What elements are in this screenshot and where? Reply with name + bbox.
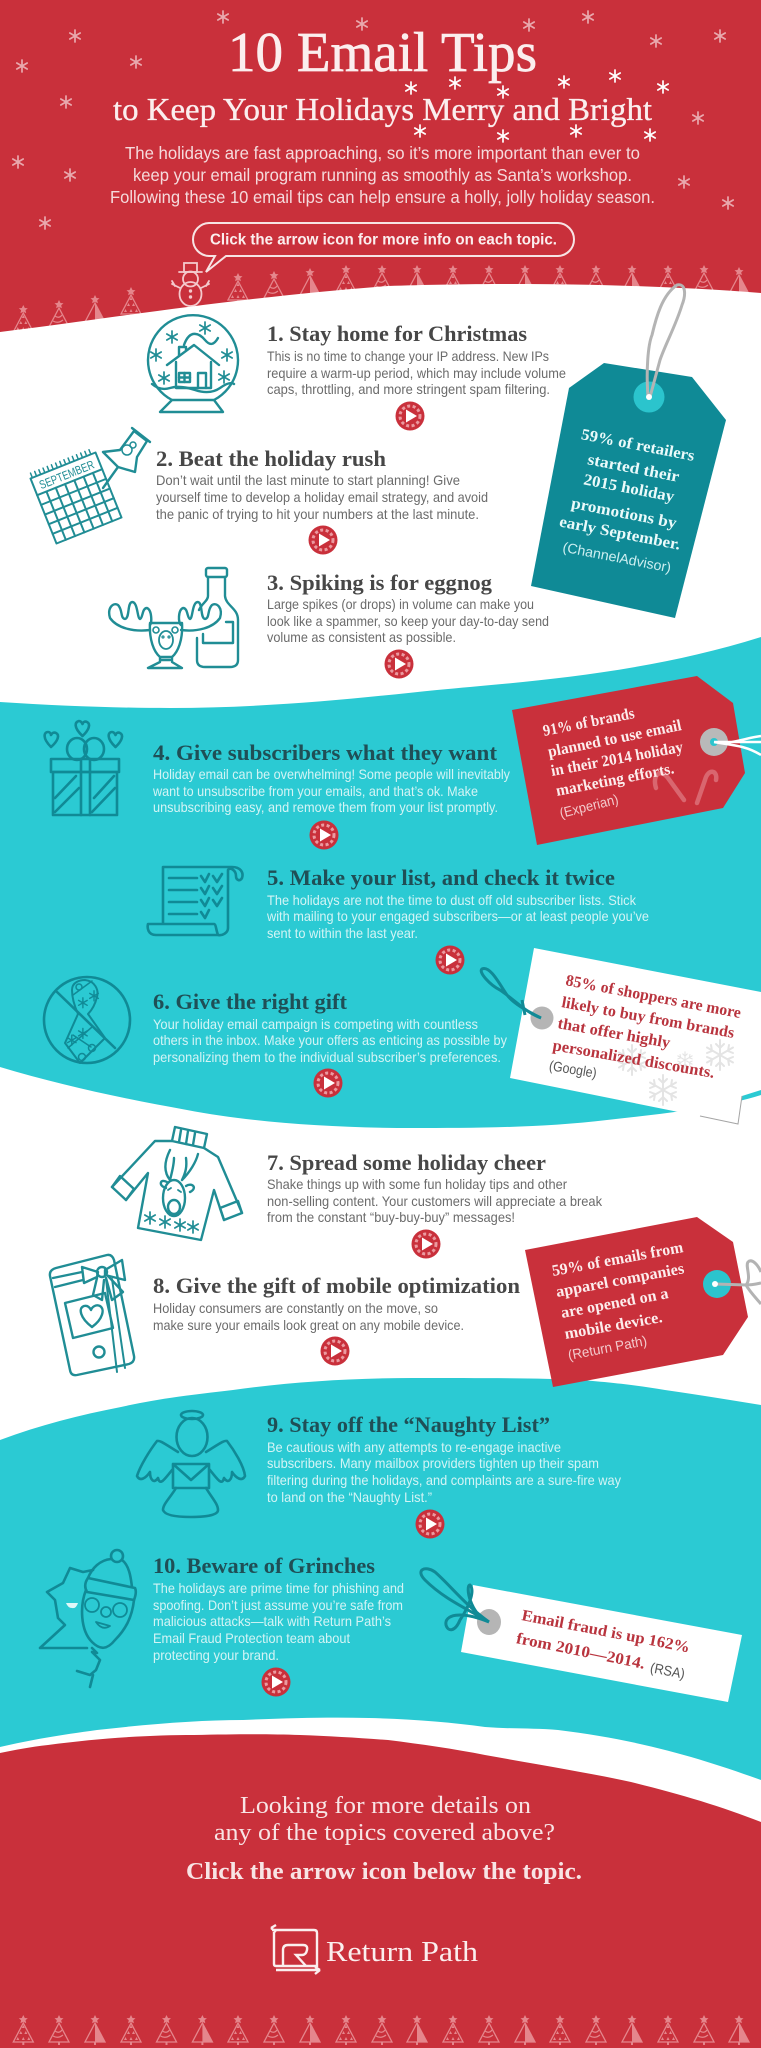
button: tip 1 arrow [396,402,424,430]
button: tip 3 arrow [384,650,414,678]
button: tip 2 arrow [308,526,338,554]
tip 5 text [266,865,649,941]
tip 9 text: to land on the “Naughty List.” [267,1489,432,1505]
tip 7 text: from the constant “buy-buy-buy” messages! [267,1209,515,1225]
tip 4 text: 4. Give subscribers what they want [153,740,498,765]
tip 10 text: 10. Beware of Grinches [153,1553,375,1578]
callout: click the arrow: Click the arrow icon for more info on each topic. [210,232,557,248]
header tree row [13,265,749,335]
tag: white 85% of shoppers: (Google) [548,1057,598,1081]
tip 6 text [153,989,507,1065]
tag: red 59% of emails [525,1217,761,1387]
footer text [186,1793,582,1885]
tip 6 text: 6. Give the right gift [153,989,348,1014]
tip 5 text: with mailing to your engaged subscribers—or at least people you’ve [266,908,649,924]
tip 4 text [152,740,510,815]
icon: calendar and pushpin [29,428,150,543]
icon: snow globe [148,315,238,412]
tag: teal 59% of retailers: 2015 holiday [582,471,676,506]
tag: teal 59% of retailers [531,285,726,618]
tag: teal 59% of retailers: started their [586,451,681,486]
tip 7 text: 7. Spread some holiday cheer [267,1150,546,1175]
white snow band above footer [0,1718,761,2048]
button: tip 9 arrow [416,1510,444,1538]
tip 9 text [267,1412,621,1505]
tip 4 text: Holiday email can be overwhelming! Some people will inevitably [153,766,510,782]
tag: red 59% of emails: apparel companies [555,1260,686,1301]
footer tree row [13,2015,749,2045]
footer text: Looking for more details on [240,1793,531,1819]
tag: white 85% of shoppers: that offer highly [556,1015,672,1052]
tip 8 text: make sure your emails look great on any mobile device. [153,1317,464,1333]
tag: white 85% of shoppers: 85% of shoppers are more [564,972,742,1022]
logo: Return Path [271,1925,479,1974]
tip 7 text [267,1150,603,1225]
tip 10 text: Email Fraud Protection team about [153,1630,350,1646]
tip 8 text [153,1273,520,1333]
tag: red 91% of brands: in their 2014 holiday [550,739,684,780]
tip 8 text: Holiday consumers are constantly on the move, so [153,1300,438,1316]
tip 10 text: protecting your brand. [153,1647,279,1663]
icon: crossed-out tie [44,977,130,1063]
tip 9 text: 9. Stay off the “Naughty List” [267,1412,550,1437]
button: tip 8 arrow [320,1336,350,1366]
tip 1 text: caps, throttling, and more stringent spam filtering. [267,381,550,397]
tip 6 text: others in the inbox. Make your offers as enticing as possible by [153,1032,507,1048]
tip 3 text [267,570,549,645]
tag: red 59% of emails: are opened on a [560,1285,670,1322]
tag: red 91% of brands: planned to use email [546,717,684,761]
tip 9 text: filtering during the holidays, and complaints are a sure-fire way [267,1472,621,1488]
tip 7 text: non-selling content. Your customers will appreciate a break [267,1193,603,1209]
icon: moose mug and bottle [109,568,238,668]
icon: holiday sweater [112,1127,242,1240]
tip 5 text: 5. Make your list, and check it twice [267,865,615,890]
tip 2 text: yourself time to develop a holiday email strategy, and avoid [156,489,488,505]
button: tip 7 arrow [412,1230,440,1258]
teal band: tips 9-10 [0,1378,761,1800]
tip 10 text: malicious attacks—talk with Return Path’s [153,1613,391,1629]
tip 3 text: look like a spammer, so keep your day-to-day send [267,613,549,629]
intro paragraph: Following these 10 email tips can help ensure a holly, jolly holiday season. [110,187,655,207]
button: tip 4 arrow [310,820,338,850]
tip 7 text: Shake things up with some fun holiday tips and other [267,1176,567,1192]
tip 5 text: The holidays are not the time to dust off old subscriber lists. Stick [267,892,637,908]
tag: white email fraud: from 2010—2014. [515,1630,646,1673]
tag: white email fraud: Email fraud is up 162% [520,1607,691,1657]
tip 2 text [156,446,488,522]
tip 3 text: 3. Spiking is for eggnog [267,570,492,595]
button: tip 5 arrow [436,946,464,974]
tag: red 91% of brands: (Experian) [558,791,620,821]
tip 1 text: This is no time to change your IP address. New IPs [267,348,549,364]
tag: white 85% of shoppers: likely to buy from brands [560,994,736,1042]
tag: white 85% of shoppers [481,948,761,1124]
tip 10 text: The holidays are prime time for phishing and [153,1580,404,1596]
tag: red 91% of brands: 91% of brands [541,705,636,740]
tip 9 text: subscribers. Many mailbox providers tighten up their spam [267,1455,599,1471]
icon: gift-wrapped phone [50,1255,134,1375]
tip 2 text: the panic of trying to hit your numbers at the last minute. [156,506,479,522]
tip 6 text: Your holiday email campaign is competing with countless [153,1016,478,1032]
tip 10 text: spoofing. Don’t just assume you’re safe from [153,1597,403,1613]
tip 3 text: Large spikes (or drops) in volume can make you [267,596,534,612]
tip 3 text: volume as consistent as possible. [267,629,456,645]
intro paragraph [110,143,655,207]
tip 2 text: 2. Beat the holiday rush [156,446,386,471]
tag: teal 59% of retailers: (ChannelAdvisor) [561,539,672,575]
tag: teal 59% of retailers: early September. [558,514,682,554]
teal band: tips 4-6 [0,637,761,1128]
decorative snow in header [13,11,733,229]
icon: grinch and santa balloon [40,1550,136,1687]
title: 10 Email Tips [228,22,537,84]
tip 5 text: sent to within the last year. [267,925,418,941]
tip 1 text [267,321,566,397]
tip 9 text: Be cautious with any attempts to re-engage inactive [267,1439,561,1455]
logo: Return Path: Return Path [326,1936,479,1968]
tag: red 59% of emails: mobile device. [563,1309,664,1343]
tip 1 text: require a warm-up period, which may include volume [267,365,566,381]
tip 4 text: unsubscribing easy, and remove them from your list promptly. [153,799,498,815]
tag: teal 59% of retailers: 59% of retailers [580,426,696,465]
icon: calendar and pushpin: SEPTEMBER [37,457,96,492]
icon: list scroll [148,867,243,935]
tip 2 text: Don’t wait until the last minute to start planning! Give [156,472,460,488]
tag: red 59% of emails: (Return Path) [567,1332,648,1363]
tag: red 59% of emails: 59% of emails from [551,1239,685,1280]
icon: gift with hearts [45,721,122,815]
footer text: Click the arrow icon below the topic. [186,1859,582,1885]
tag: white email fraud: (RSA) [649,1659,686,1682]
button: tip 6 arrow [314,1068,342,1098]
tip 10 text [153,1553,404,1663]
icon: angel with envelope [137,1411,245,1517]
icon: snowman [172,263,209,306]
tip 1 text: 1. Stay home for Christmas [267,321,527,346]
tip 8 text: 8. Give the gift of mobile optimization [153,1273,520,1298]
button: tip 10 arrow [262,1668,290,1696]
panel: red footer [0,1734,761,2048]
tag: white 85% of shoppers: personalized discounts. [551,1037,716,1082]
subtitle: to Keep Your Holidays Merry and Bright [113,91,652,127]
intro paragraph: keep your email program running as smoothly as Santa’s workshop. [133,165,632,185]
tag: white email fraud [421,1569,742,1702]
tip 4 text: want to unsubscribe from your emails, and that’s ok. Make [152,783,478,799]
tip 6 text: personalizing them to the individual subscriber’s preferences. [153,1049,501,1065]
intro paragraph: The holidays are fast approaching, so it’s more important than ever to [125,143,640,163]
tag: red 91% of brands [512,676,761,845]
callout: click the arrow [193,223,574,272]
tag: red 91% of brands: marketing efforts. [555,760,676,800]
tag: teal 59% of retailers: promotions by [570,495,678,532]
footer text: any of the topics covered above? [214,1820,555,1846]
